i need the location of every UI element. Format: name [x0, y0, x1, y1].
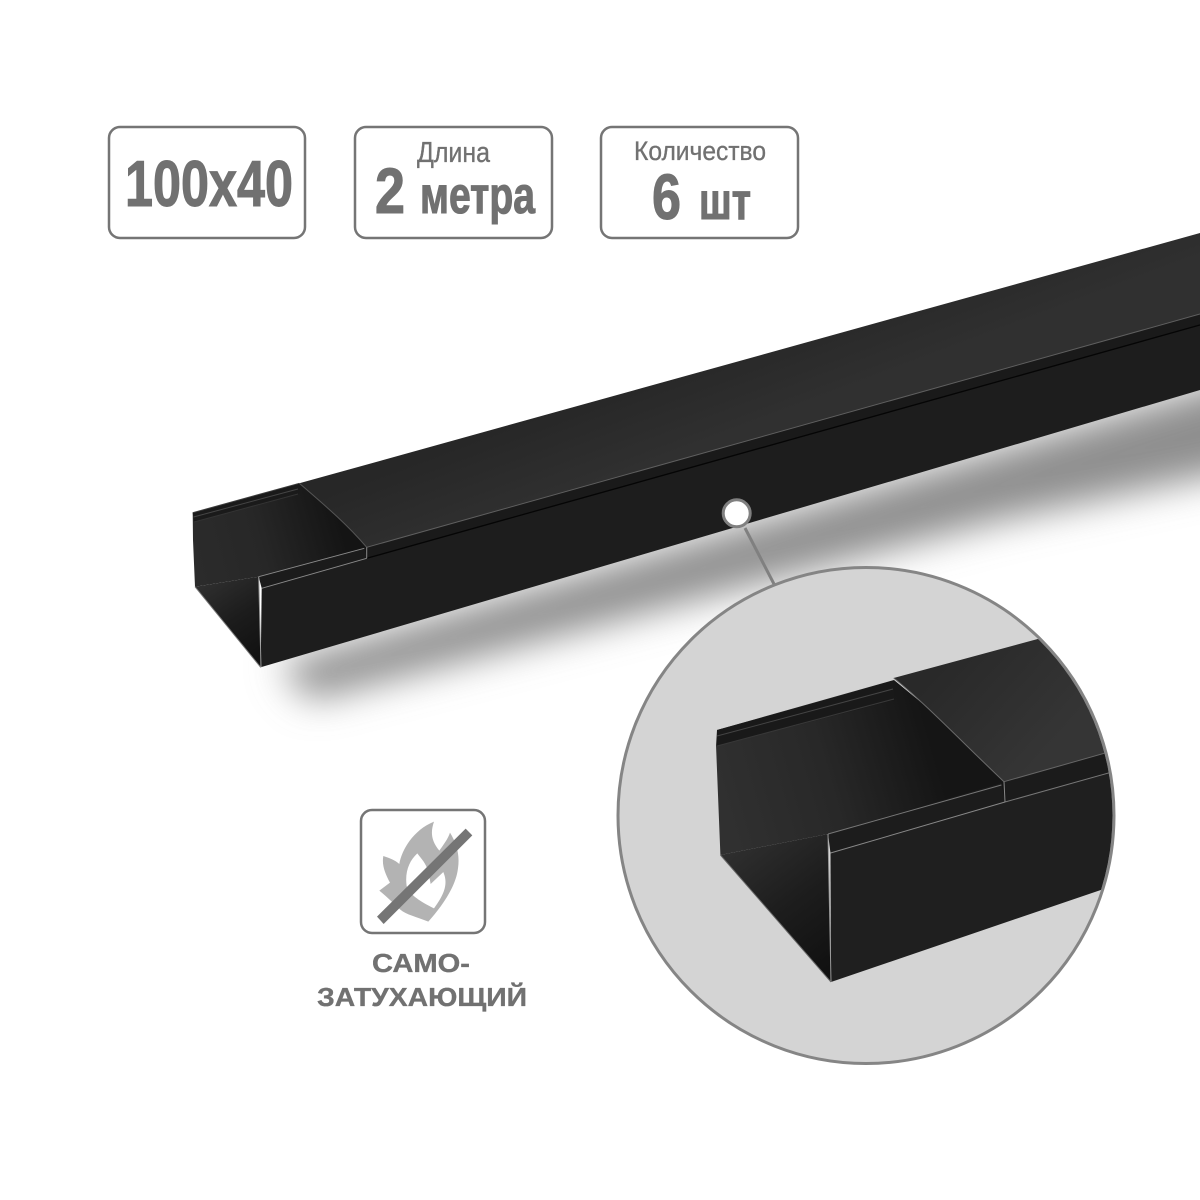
label: self-extinguishing [317, 948, 527, 1012]
product: cable duct [193, 233, 1200, 668]
inset side [830, 767, 1130, 982]
duct front lip [259, 548, 367, 588]
product shadow [280, 372, 1200, 700]
label: self-extinguishing: САМО- [372, 948, 470, 978]
icon: crossed-out flame [377, 822, 472, 924]
inset lip [828, 810, 974, 853]
inset inner wall [716, 680, 1004, 855]
inset circle: duct close-up [618, 568, 1130, 1064]
duct side [261, 325, 1200, 667]
badge: length 2 metres: метра [420, 167, 536, 225]
badge: length 2 metres: 2 [375, 155, 405, 227]
badge: length 2 metres: Длина [417, 137, 491, 169]
badge: length 2 metres [355, 127, 552, 238]
badge: quantity 6 pieces: Количество [634, 136, 766, 166]
inset lid top [894, 639, 1104, 781]
badge: quantity 6 pieces: шт [699, 173, 751, 231]
duct inner wall [193, 483, 400, 587]
label: self-extinguishing: ЗАТУХАЮЩИЙ [317, 982, 527, 1012]
callout leader line [745, 528, 775, 586]
badge: size 100x40 [109, 127, 305, 238]
badge: quantity 6 pieces: 6 [652, 161, 681, 233]
callout marker dot [723, 500, 750, 527]
badge: size 100x40: 100x40 [125, 147, 293, 220]
inset floor [720, 834, 831, 982]
duct lid top [299, 233, 1200, 547]
fire-retardant badge [361, 810, 485, 933]
duct back ridge [193, 483, 300, 522]
inset ridge [717, 688, 894, 746]
duct floor [195, 577, 261, 668]
badge: quantity 6 pieces [601, 127, 798, 238]
duct lid edge [367, 314, 1200, 558]
inset lid edge [1014, 754, 1109, 794]
